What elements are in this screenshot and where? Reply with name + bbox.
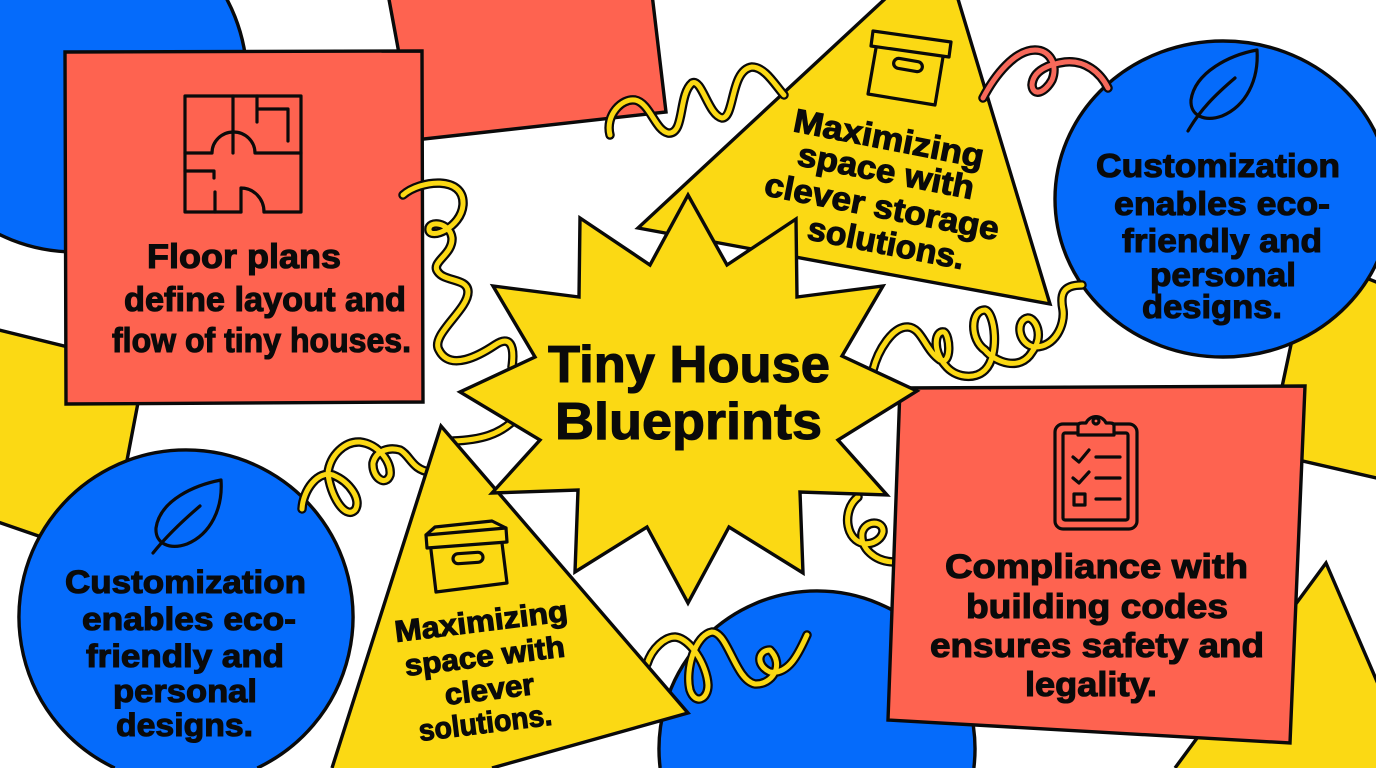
title: Tiny House (548, 336, 830, 394)
squiggle: lower triangle to bottom circle (647, 632, 807, 699)
text: customization top right: friendly and (1122, 222, 1322, 259)
text: floor plans: Floor plans (147, 238, 341, 276)
text: storage bottom: Maximizing (393, 595, 570, 649)
text: customization top right (1096, 147, 1340, 325)
panel: storage triangle top (638, 0, 1050, 304)
icon: storage box bottom (426, 521, 507, 592)
text: storage top: clever storage (762, 166, 1002, 247)
text: customization top right: personal (1150, 256, 1296, 293)
text: storage bottom: solutions. (417, 699, 554, 748)
title (548, 336, 830, 451)
text: compliance: ensures safety and (930, 627, 1264, 665)
panel: customization circle top right (1055, 41, 1376, 357)
text: customization top right: designs. (1142, 288, 1282, 325)
background shape: yellow square left (0, 329, 145, 560)
background shape: yellow triangle bottom right (1175, 563, 1376, 768)
panel: compliance card (888, 386, 1305, 743)
squiggle: storage triangle to circle (red) (983, 50, 1108, 98)
text: customization bottom left: enables eco- (82, 601, 296, 637)
panel: center starburst title (460, 195, 917, 603)
squiggle: top red square to storage triangle (609, 67, 784, 135)
text: customization bottom left: personal (113, 673, 257, 709)
text: storage bottom (393, 595, 570, 748)
panel: floor plans card (65, 51, 423, 404)
text: floor plans: flow of tiny houses. (112, 322, 411, 360)
text: storage top: Maximizing (791, 102, 987, 175)
background shape: blue circle bottom (659, 591, 975, 768)
text: compliance: building codes (966, 588, 1228, 626)
icon: leaf bottom left (153, 480, 221, 553)
text: customization top right: enables eco- (1114, 185, 1330, 222)
text: compliance: legality. (1025, 666, 1157, 704)
text: storage top: space with (795, 136, 977, 206)
squiggle: center to compliance card (848, 497, 895, 562)
text: floor plans (112, 238, 411, 360)
squiggle: center to customization circle (873, 285, 1082, 376)
text: storage bottom: clever (443, 668, 537, 712)
panel: storage triangle bottom (332, 426, 688, 768)
squiggle: floor plans to center (403, 183, 513, 367)
panel: customization circle bottom left (19, 450, 353, 768)
background shape: blue circle top left (0, 0, 247, 252)
text: customization bottom left (65, 564, 306, 743)
icon: clipboard checklist (1055, 417, 1137, 529)
text: compliance: Compliance with (945, 548, 1248, 586)
background shape: yellow square right (1268, 255, 1376, 479)
text: customization bottom left: friendly and (86, 638, 284, 674)
text: floor plans: define layout and (124, 281, 406, 319)
text: customization bottom left: designs. (116, 707, 253, 743)
text: storage top: solutions. (805, 210, 968, 276)
icon: floor plan (185, 96, 301, 212)
squiggle: center to lower triangle (453, 418, 516, 441)
text: compliance (930, 548, 1264, 704)
icon: storage box top (868, 31, 951, 105)
background shape: red square top (388, 0, 666, 140)
title: Blueprints (555, 393, 822, 451)
text: customization top right: Customization (1096, 147, 1340, 184)
squiggle: bottom left circle to lower triangle (302, 442, 430, 512)
text: storage top (762, 102, 1002, 276)
icon: leaf top right (1188, 50, 1257, 131)
text: customization bottom left: Customization (65, 564, 306, 600)
text: storage bottom: space with (403, 631, 567, 683)
